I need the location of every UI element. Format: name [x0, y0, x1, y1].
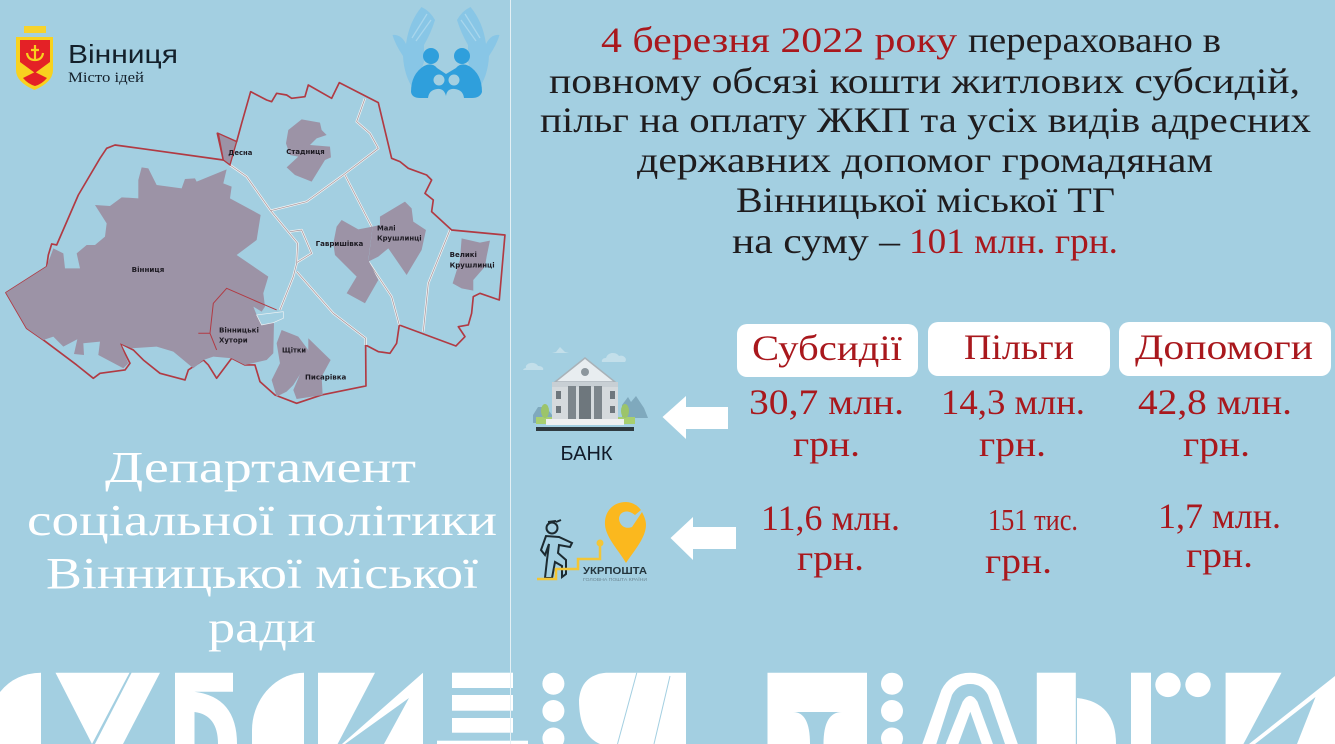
- heading: department name: ради: [208, 603, 316, 652]
- heading: department name: [27, 443, 497, 652]
- map: place labels: Гавришівка: [316, 240, 363, 248]
- map: Vinnytsia area: [6, 167, 274, 368]
- letter У: [56, 673, 130, 744]
- arrow: to bank: [662, 396, 728, 439]
- parents: [423, 48, 439, 64]
- icon: Ukrposhta logo with walker: [537, 502, 647, 582]
- map of Vinnytsia community: [6, 83, 505, 403]
- map: Veliki Krushlyntsi area: [453, 238, 490, 291]
- headline text block: [540, 20, 1311, 261]
- values: post row: грн.: [985, 541, 1052, 581]
- heading: department name: Департамент: [105, 443, 416, 492]
- values: post row: 11,6 млн.: [761, 498, 900, 538]
- icon: bank building: [523, 347, 648, 431]
- column header: Пільги: [928, 322, 1110, 376]
- letter Е: [452, 673, 513, 688]
- map: place labels: Крушлинці: [450, 261, 495, 269]
- letter И: [318, 673, 375, 744]
- icon: coat of arms: [16, 26, 53, 90]
- headline text block: 101 млн. грн.: [909, 221, 1118, 261]
- arrow: to post office: [670, 517, 736, 560]
- letter Ї dots: [542, 673, 564, 695]
- map: Havryshivka area: [333, 220, 378, 303]
- column header: Допомоги: Допомоги: [1135, 327, 1313, 367]
- map: Desna area: [218, 133, 237, 165]
- decorative lettering: СУБСИДІЯ ПІЛЬГИ: [0, 672, 1335, 744]
- center divider: [510, 0, 511, 744]
- map: place labels: Великі: [450, 251, 477, 259]
- values: bank row: 14,3 млн.: [941, 382, 1085, 422]
- wordmark tagline: ГОЛОВНА ПОШТА КРАЇНИ: [583, 576, 647, 582]
- headline text block: 4 березня 2022 року: [601, 20, 957, 60]
- slits in letter Я: [618, 673, 670, 744]
- wordmark: УКРПОШТА: [583, 566, 647, 577]
- values: post row: 1,7 млн.: [1158, 496, 1281, 536]
- headline text block: державних допомог громадянам: [637, 140, 1213, 180]
- values: bank row: грн.: [979, 424, 1046, 464]
- logo wordmark: Вінниця: [68, 39, 178, 69]
- values: bank row: 42,8 млн.: [1138, 382, 1292, 422]
- icon: hands protecting family: [392, 7, 500, 98]
- map: Shchitky area: [272, 330, 308, 397]
- letter Ь: [1037, 673, 1076, 744]
- values: post row: грн.: [1186, 535, 1253, 575]
- column header: Субсидії: Субсидії: [752, 328, 902, 368]
- values: post row: [761, 496, 1281, 581]
- heading: department name: Вінницької міської: [46, 549, 479, 598]
- headline text block: повному обсязі кошти житлових субсидій,: [549, 61, 1300, 101]
- headline text block: перераховано в: [968, 20, 1221, 60]
- values: bank row: грн.: [1183, 424, 1250, 464]
- map: Stadnytsia area: [286, 119, 331, 182]
- letter Г: [1131, 673, 1151, 744]
- map: place labels: [132, 148, 495, 382]
- logo: Vinnytsia city: [16, 26, 178, 90]
- yellow pin marker: [605, 502, 646, 563]
- letter С: [0, 673, 41, 744]
- letter И: [1226, 673, 1282, 744]
- values: bank row: [749, 382, 1292, 464]
- values: post row: грн.: [797, 538, 864, 578]
- heading: department name: соціальної політики: [27, 496, 497, 545]
- map: place labels: Крушлинці: [377, 235, 422, 243]
- walker figure: [541, 520, 572, 578]
- map: place labels: Щітки: [282, 347, 306, 355]
- letter Л/А: [922, 673, 1018, 744]
- letter П: [768, 673, 867, 744]
- map: Mali Krushlyntsi area: [368, 202, 426, 275]
- map: place labels: Малі: [377, 224, 396, 232]
- letter Б: [175, 673, 237, 744]
- map: place labels: Десна: [228, 149, 252, 157]
- headline text block: пільг на оплату ЖКП та усіх видів адресних: [540, 100, 1311, 140]
- column header: Допомоги: [1119, 322, 1331, 376]
- finger lines: [412, 14, 480, 41]
- yellow stairs path: [537, 542, 600, 579]
- map: place labels: Вінниця: [132, 266, 164, 274]
- map: Vinnytski Khutory border: [198, 288, 277, 350]
- column header: Субсидії: [737, 324, 918, 377]
- letter С: [252, 673, 304, 744]
- logo tagline: Місто ідей: [68, 70, 144, 86]
- headline text block: Вінницької міської ТГ: [736, 180, 1115, 220]
- letter І dots: [881, 673, 903, 695]
- right hand: [457, 7, 500, 90]
- map: place labels: Писарівка: [305, 374, 346, 382]
- values: bank row: грн.: [793, 424, 860, 464]
- map: place labels: Стадниця: [286, 148, 325, 156]
- children: [434, 74, 444, 86]
- letter Я: [579, 673, 686, 744]
- values: bank row: 30,7 млн.: [749, 382, 904, 422]
- column header: Пільги: Пільги: [964, 327, 1074, 367]
- headline text block: на суму –: [732, 221, 901, 261]
- map: inner borders: [230, 98, 450, 345]
- values: post row: 151 тис.: [988, 502, 1078, 537]
- map: outer boundary: [6, 83, 505, 403]
- map: place labels: Вінницькі: [219, 327, 259, 335]
- map: place labels: Хутори: [219, 337, 248, 345]
- label: bank: БАНК: [560, 443, 613, 465]
- left hand: [392, 7, 435, 90]
- map: Pysarivka area: [293, 338, 331, 399]
- map: lake: [257, 312, 283, 325]
